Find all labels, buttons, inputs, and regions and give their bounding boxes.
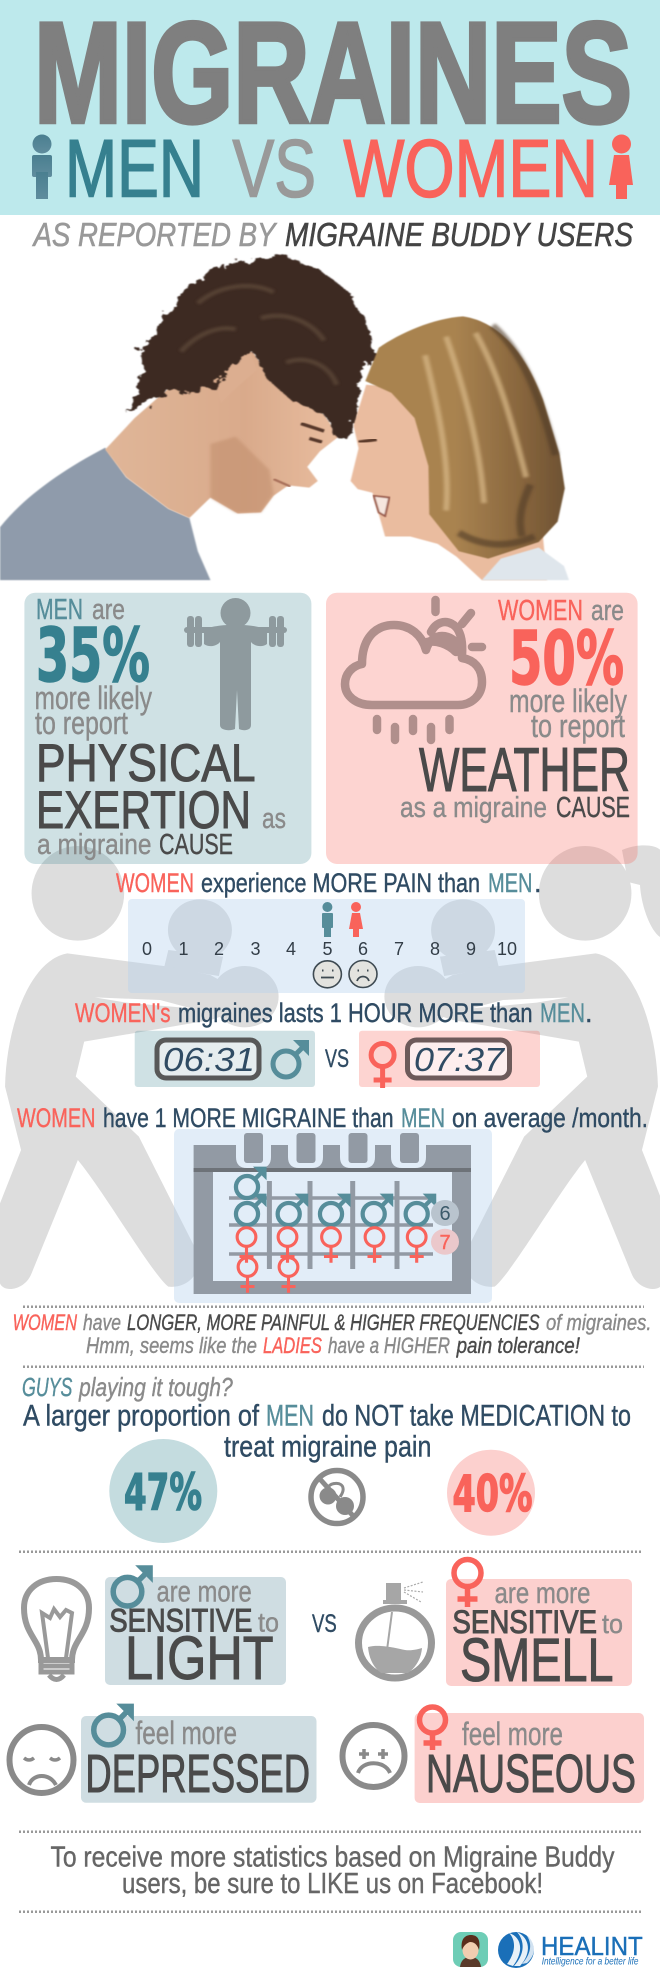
scale numbers: 3 <box>250 939 261 959</box>
woman's mouth <box>374 496 389 516</box>
text: guys playing it tough: playing it tough? <box>78 1372 233 1402</box>
man's mouth <box>274 479 290 486</box>
men symbols <box>236 1167 436 1225</box>
scale numbers: 9 <box>466 939 476 959</box>
icon: depressed face <box>10 1727 74 1793</box>
woman's hair shade <box>459 326 556 544</box>
icon: light bulb <box>24 1579 89 1680</box>
scale numbers: 6 <box>358 939 368 959</box>
badge: women seven: 7 <box>439 1232 451 1254</box>
text: conclusion: Hmm, seems like the <box>86 1333 257 1358</box>
text: light: LIGHT <box>125 1624 274 1692</box>
heading: medication: A larger proportion of <box>23 1400 260 1433</box>
panel: nauseous <box>415 1707 644 1804</box>
panel: women clock <box>359 1031 540 1088</box>
heading: one more migraine: MEN <box>401 1103 445 1133</box>
stat circle: women 40% <box>447 1450 535 1536</box>
calendar ring cutouts <box>236 1140 426 1168</box>
heading: medication: treat migraine pain <box>224 1431 431 1464</box>
men label: MEN <box>65 124 204 214</box>
heading: more pain: WOMEN <box>116 868 194 898</box>
text: conclusion: pain tolerance! <box>456 1333 580 1358</box>
scale numbers: 0 <box>142 939 152 959</box>
scale numbers: 8 <box>430 939 440 959</box>
text: are more: are more <box>156 1576 252 1609</box>
clock frame <box>157 1040 259 1078</box>
icon: woman marker <box>349 902 363 937</box>
background: boxing silhouettes <box>0 845 660 1289</box>
heading: medication <box>23 1400 631 1464</box>
woman's skin <box>351 385 547 580</box>
text: conclusion: LONGER, MORE PAINFUL & HIGHER FREQUENCIES <box>127 1310 540 1335</box>
panel: men physical exertion: to report <box>35 705 128 741</box>
panel: men physical exertion: CAUSE <box>159 829 233 861</box>
text: women are: WOMEN <box>498 595 583 627</box>
scale numbers <box>142 939 517 959</box>
clock frame <box>408 1040 510 1078</box>
woman's top <box>482 548 569 580</box>
women label: WOMEN <box>344 124 598 214</box>
heading: one more migraine: have 1 MORE MIGRAINE than <box>103 1103 394 1133</box>
stat circle: men 47% <box>109 1439 217 1543</box>
panel: calendar <box>174 1129 492 1303</box>
icon: venus <box>371 1044 394 1088</box>
heading: lasts one hour more: MEN <box>540 998 585 1028</box>
icon: mars <box>273 1040 309 1077</box>
heading: men vs women <box>32 124 633 214</box>
scale numbers: 5 <box>322 939 333 959</box>
icon: sad face <box>349 960 377 988</box>
women symbols <box>237 1228 426 1293</box>
text: guys playing it tough: GUYS <box>22 1372 73 1402</box>
man's brow and eye <box>301 424 324 442</box>
stat circle: men 47%: 47% <box>124 1464 202 1522</box>
panel: sensitive to light <box>105 1565 286 1692</box>
icon: perfume bottle <box>358 1582 432 1678</box>
panel: men physical exertion <box>24 593 311 864</box>
text: as a migraine cause: as a migraine <box>400 792 547 824</box>
heading: more pain: MEN <box>488 868 532 898</box>
stat circle: women 40%: 40% <box>452 1465 532 1523</box>
silhouette: ponytail <box>622 845 660 937</box>
panel: sensitive to light: to <box>258 1608 279 1638</box>
heading: one more migraine: WOMEN <box>17 1103 96 1133</box>
icon: mars <box>113 1565 153 1606</box>
vs label: VS <box>325 1045 349 1073</box>
photo: couple head to head <box>0 255 569 580</box>
icon: neutral face <box>313 961 341 988</box>
text: conclusion: LADIES <box>263 1333 322 1358</box>
subtitle <box>32 216 633 253</box>
text: are more: are more <box>494 1577 590 1610</box>
icon: weightlifter <box>184 598 287 730</box>
silhouette: left boxer <box>0 846 279 1289</box>
icon: mars <box>94 1704 134 1745</box>
scale numbers: 1 <box>178 939 189 959</box>
icon: man <box>32 134 52 199</box>
calendar grid <box>229 1181 433 1269</box>
man's jaw shade <box>210 437 274 513</box>
man's skin <box>105 351 339 518</box>
scale numbers: 7 <box>394 939 404 959</box>
text: more likely to report: more likely <box>509 683 627 719</box>
text: a migraine cause: a migraine <box>37 829 152 861</box>
text: depressed: DEPRESSED <box>85 1744 310 1804</box>
badge: men six <box>431 1200 459 1226</box>
icon: man marker <box>322 902 333 937</box>
heading: more pain: experience MORE PAIN than <box>201 868 480 898</box>
text: conclusion: have <box>83 1310 121 1335</box>
woman's hair <box>365 316 565 559</box>
logo: healint: HEALINT <box>541 1931 643 1961</box>
heading: one more migraine <box>17 1103 648 1133</box>
header band <box>0 0 660 215</box>
text: call to action: users, be sure to LIKE us on Facebook! <box>122 1868 543 1900</box>
icon: weather cloud <box>345 600 482 740</box>
panel: pain scale <box>128 899 525 993</box>
panel: men physical exertion: as <box>262 803 286 835</box>
scale numbers: 4 <box>286 939 296 959</box>
panel: men physical exertion: EXERTION <box>36 781 251 840</box>
woman's hair streaks <box>425 333 526 511</box>
panel: women weather <box>326 593 638 864</box>
text: conclusion <box>13 1310 652 1358</box>
man's hair <box>128 255 375 440</box>
heading: lasts one hour more: WOMEN's <box>75 998 170 1028</box>
badge: women seven <box>431 1229 459 1255</box>
panel: men clock <box>135 1031 315 1087</box>
icon: woman <box>609 134 633 199</box>
man's hair highlights <box>181 286 337 385</box>
text: more likely to report: more likely <box>34 680 152 716</box>
heading: lasts one hour more: migraines lasts 1 HOUR MORE than <box>178 998 532 1028</box>
icon: nauseous face <box>342 1725 404 1787</box>
text: call to action <box>50 1842 615 1900</box>
icon: migraine buddy app <box>453 1932 488 1967</box>
man's ear <box>218 346 257 403</box>
text: physical exertion: PHYSICAL <box>36 734 256 793</box>
heading: more pain: . <box>534 868 542 898</box>
calendar body <box>194 1145 471 1294</box>
text: sensitive to: SENSITIVE <box>109 1603 252 1639</box>
icon: no pills <box>311 1470 363 1524</box>
vs label: VS <box>312 1610 337 1638</box>
heading: medication: MEN <box>266 1400 314 1433</box>
text: smell: SMELL <box>460 1626 614 1694</box>
text: sensitive to: SENSITIVE <box>452 1604 597 1640</box>
text: conclusion: have a HIGHER <box>328 1333 450 1358</box>
panel: depressed <box>81 1704 316 1804</box>
badge: men six: 6 <box>439 1203 451 1225</box>
icon: venus <box>420 1707 446 1750</box>
panel: sensitive to smell <box>446 1560 632 1694</box>
scale numbers: 10 <box>497 939 517 959</box>
stat: 35%: 35% <box>36 613 150 699</box>
heading: lasts one hour more: . <box>585 998 593 1028</box>
text: feel more: feel more <box>136 1715 237 1751</box>
panel: women weather: to report <box>531 708 625 744</box>
panel: men physical exertion: are <box>92 594 125 626</box>
calendar rings <box>244 1133 419 1163</box>
vs label: VS <box>232 124 316 214</box>
text: guys playing it tough <box>22 1372 233 1402</box>
woman's eye <box>359 440 377 442</box>
clock digits: 07:37 <box>414 1041 506 1078</box>
text: feel more: feel more <box>462 1716 563 1752</box>
subtitle: AS REPORTED BY <box>32 216 277 253</box>
scale numbers: 2 <box>214 939 224 959</box>
panel: women weather: are <box>591 595 624 627</box>
calendar header line <box>194 1168 471 1172</box>
text: conclusion: WOMEN <box>13 1310 77 1335</box>
icon: venus <box>454 1560 481 1607</box>
clock digits: 06:31 <box>163 1041 255 1078</box>
panel: women weather: CAUSE <box>556 792 630 824</box>
silhouette: right boxer <box>384 846 660 1289</box>
panel: sensitive to smell: to <box>602 1609 623 1639</box>
logo: healint <box>498 1931 643 1968</box>
man's shirt <box>0 448 210 580</box>
text: men are: MEN <box>36 594 83 626</box>
